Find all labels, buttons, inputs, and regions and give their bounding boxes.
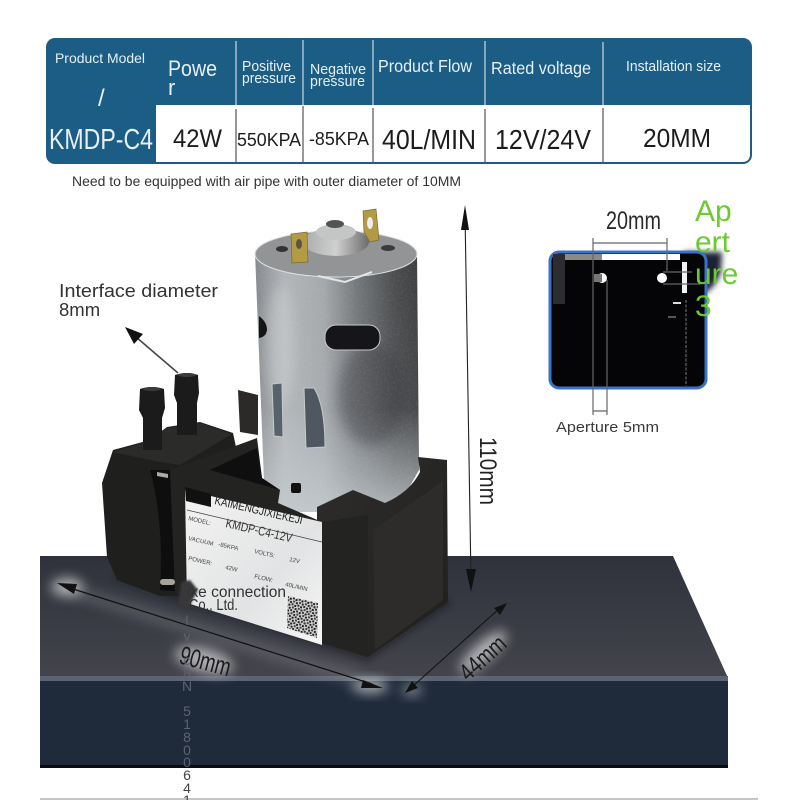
- dark smudge behind green label: [684, 252, 722, 298]
- vertical overlay text: 0: [183, 742, 191, 758]
- table header labels: KMDP-C4: [49, 124, 153, 156]
- interface diameter label: Interface diameter: [59, 280, 218, 301]
- arrow: depth dimension: [405, 603, 507, 693]
- table values: -85KPA: [309, 128, 370, 149]
- vertical overlay text: N: [182, 678, 192, 694]
- vertical overlay text: c: [184, 652, 190, 668]
- nameplate fields: VACUUM: [188, 536, 214, 548]
- 90mm label: 90mm: [176, 640, 234, 682]
- vertical overlay text: 8: [183, 665, 191, 681]
- nameplate fields: POWER:: [188, 556, 213, 567]
- brass terminals: [291, 209, 379, 263]
- table values: [173, 123, 711, 155]
- nameplate QR code: [287, 596, 318, 638]
- bottom rule: [40, 798, 758, 800]
- table values: 42W: [173, 125, 222, 153]
- nameplate logo: [185, 487, 211, 507]
- motor vent slots: [272, 325, 380, 448]
- nameplate fields: -85KPA: [218, 542, 239, 553]
- 44mm label: 44mm: [454, 630, 512, 686]
- mounting plate photo: [550, 252, 706, 388]
- table header labels: Product Flow: [378, 56, 472, 76]
- nameplate fields: VOLTS:: [254, 549, 276, 560]
- table header labels: Negative: [310, 62, 366, 78]
- vertical overlay text: 4: [183, 780, 191, 796]
- platform: [40, 556, 728, 768]
- aperture 5mm label: Aperture 5mm: [556, 419, 659, 436]
- dimension halos: [51, 578, 511, 696]
- overlay text: like connection: Co., Ltd.: [189, 597, 238, 614]
- platform top face: [40, 556, 728, 678]
- vertical overlay text: I: [185, 612, 189, 628]
- platform front face: [40, 678, 728, 768]
- smudge over label: [178, 580, 198, 610]
- table header labels: pressure: [242, 71, 296, 87]
- nameplate model: KMDP-C4-12V: [224, 516, 294, 545]
- green aperture label: ert: [695, 226, 731, 259]
- vertical overlay text: 1: [183, 716, 191, 732]
- vertical overlay text: v: [184, 628, 190, 644]
- nameplate fields: FLOW:: [254, 574, 274, 584]
- motor can: [250, 209, 425, 515]
- pump body right block: [317, 457, 448, 657]
- arrow: interface pointer: [125, 327, 178, 373]
- table header labels: Installation size: [626, 59, 721, 75]
- table header labels: pressure: [310, 74, 365, 90]
- table header labels: Product Model: [55, 50, 145, 66]
- arrow: length dimension: [57, 583, 383, 688]
- mounting holes: [594, 273, 667, 283]
- side bracket: [238, 390, 258, 435]
- pump head: [102, 422, 236, 596]
- nameplate brand: KAIMENGJIXIEKEJI: [213, 495, 304, 527]
- 110mm label: 110mm: [474, 437, 501, 505]
- panel: aperture detail: [550, 195, 747, 436]
- arrow: height dimension: [461, 205, 476, 592]
- nameplate fields: MODEL:: [188, 516, 212, 527]
- nameplate fields: [188, 516, 308, 593]
- dimension lines: [593, 238, 700, 415]
- green aperture label: 3: [695, 290, 712, 323]
- motor end cap: [255, 231, 417, 277]
- vertical overlay text: 0: [183, 754, 191, 770]
- vertical overlay text: [182, 612, 192, 800]
- table header labels: Rated voltage: [491, 58, 591, 78]
- table value area: [156, 105, 750, 162]
- green aperture label: ure: [695, 258, 738, 291]
- nameplate fields: 12V: [289, 557, 300, 565]
- table background: [46, 38, 752, 164]
- table values: 20MM: [643, 123, 711, 153]
- 20mm label: 20mm: [606, 207, 661, 235]
- air pipe note: Need to be equipped with air pipe with outer diameter of 10MM: [72, 173, 461, 189]
- table values: 12V/24V: [495, 124, 591, 155]
- pump body front frame: [170, 438, 368, 657]
- shaft pin: [160, 579, 175, 585]
- table values: 550KPA: [237, 129, 302, 150]
- panel: specification table: [46, 38, 752, 164]
- table header labels: Positive: [242, 59, 291, 75]
- table header labels: [49, 50, 721, 156]
- product photo: pump: [102, 209, 452, 662]
- pump nameplate: [185, 487, 322, 645]
- nameplate fields: 42W: [225, 565, 238, 574]
- table values: 40L/MIN: [382, 124, 476, 155]
- vertical overlay text: 5: [183, 703, 191, 719]
- vertical overlay text: 8: [183, 729, 191, 745]
- hose barbs: [139, 373, 199, 450]
- interface diameter label: 8mm: [59, 299, 100, 320]
- vertical overlay text: 6: [183, 767, 191, 783]
- table header labels: Powe: [168, 56, 217, 81]
- contact shadow: [110, 560, 452, 662]
- overlay text: like connection: ike connection: [187, 584, 286, 601]
- green aperture label: Ap: [695, 195, 732, 228]
- table header labels: /: [98, 85, 105, 112]
- table header labels: r: [168, 75, 175, 100]
- nameplate fields: 40L/MIN: [285, 582, 308, 593]
